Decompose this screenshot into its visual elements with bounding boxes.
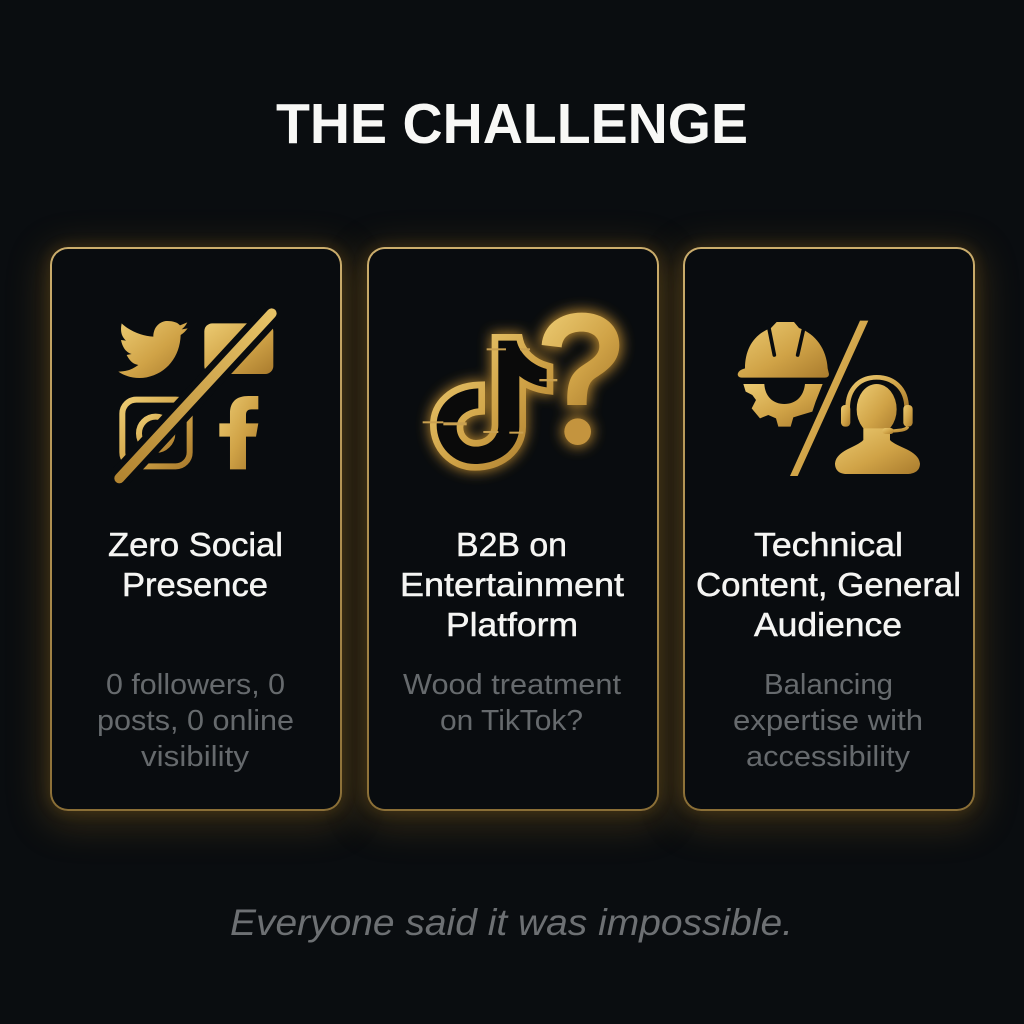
- heading: [696, 526, 961, 643]
- description: posts, 0 online: [97, 705, 294, 737]
- icon: crossed-out social networks: [118, 313, 273, 478]
- icon: glitched tiktok note and question mark: [423, 313, 619, 464]
- description: Wood treatment: [403, 669, 621, 701]
- closing tagline: Everyone said it was impossible.: [230, 902, 793, 943]
- heading: Presence: [122, 566, 268, 603]
- heading: [108, 526, 283, 603]
- panel: b2b on entertainment platform: [367, 247, 659, 811]
- panel: zero social presence: [50, 247, 342, 811]
- description: visibility: [141, 741, 250, 773]
- description: 0 followers, 0: [106, 669, 285, 701]
- description: [97, 669, 294, 773]
- heading: [400, 526, 624, 643]
- heading: B2B on: [456, 526, 567, 563]
- icon: hard hat gear versus support person: [738, 321, 920, 476]
- description: [733, 669, 923, 773]
- panel: technical content, general audience: [683, 247, 975, 811]
- heading: Platform: [446, 606, 578, 643]
- title: THE CHALLENGE: [276, 92, 748, 156]
- heading: Zero Social: [108, 526, 283, 563]
- description: on TikTok?: [440, 705, 583, 737]
- description: Balancing: [764, 669, 893, 701]
- heading: Audience: [754, 606, 902, 643]
- description: accessibility: [746, 741, 911, 773]
- description: [403, 669, 621, 737]
- description: expertise with: [733, 705, 923, 737]
- heading: Technical: [754, 526, 903, 563]
- heading: Content, General: [696, 566, 961, 603]
- heading: Entertainment: [400, 566, 624, 603]
